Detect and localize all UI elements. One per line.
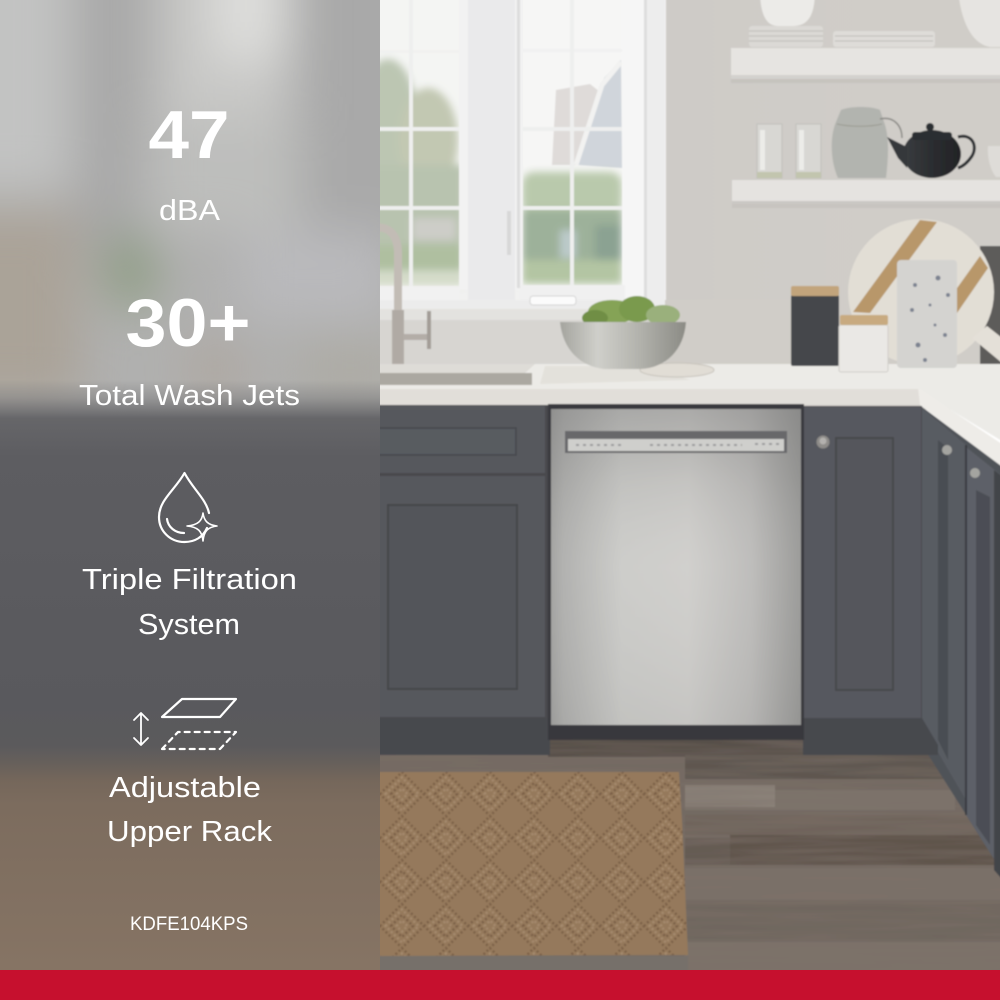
faucet — [370, 227, 431, 366]
right cabinet door — [803, 406, 938, 755]
photo: kitchen scene — [358, 0, 1000, 990]
towel and plate — [540, 363, 714, 384]
counter — [360, 364, 1000, 482]
pitcher — [832, 107, 902, 178]
label dBA: dBA — [159, 195, 221, 227]
jars — [791, 286, 888, 372]
cutting board — [848, 219, 1000, 378]
label triple filtration: Triple Filtration — [82, 564, 297, 596]
left cabinets — [360, 405, 550, 755]
window muntins — [360, 0, 622, 286]
control panel — [565, 431, 787, 453]
right cabinets side — [922, 407, 1000, 900]
shelf items upper — [749, 0, 1000, 47]
feature: adjustable upper rack: Upper Rack — [107, 816, 273, 848]
feature: triple filtration — [82, 473, 297, 641]
floor strip — [360, 956, 688, 980]
stat: 47 dBA — [148, 97, 230, 227]
red footer bar — [0, 970, 1000, 1000]
icon: adjustable rack — [134, 699, 236, 749]
glasses — [757, 124, 821, 178]
window frame — [360, 0, 666, 321]
bowl with greens — [560, 296, 686, 369]
feature: triple filtration: System — [138, 609, 240, 641]
dishwasher — [548, 404, 804, 740]
rug — [360, 772, 688, 956]
window — [358, 0, 666, 322]
shelf lower — [732, 180, 1000, 208]
icon: water drop with sparkle — [159, 473, 217, 542]
shelf upper — [731, 48, 1000, 83]
stat: 30+ wash jets — [79, 285, 300, 412]
left frosted panel — [0, 0, 380, 970]
teapot — [887, 123, 974, 178]
dark gradient overlay — [0, 380, 380, 970]
wall — [360, 0, 1000, 410]
feature: adjustable upper rack — [107, 699, 273, 848]
label adjustable upper rack: Adjustable — [109, 772, 261, 804]
small bowl — [988, 146, 1000, 177]
number 30+: 30+ — [126, 285, 250, 361]
model number: KDFE104KPS — [130, 913, 248, 935]
backsplash — [360, 320, 665, 366]
floor — [360, 735, 1000, 990]
dark backdrop — [980, 246, 1000, 364]
left window glass view — [358, 0, 464, 286]
right window glass view — [522, 0, 622, 285]
label total wash jets: Total Wash Jets — [79, 380, 300, 412]
number 47: 47 — [148, 97, 230, 173]
